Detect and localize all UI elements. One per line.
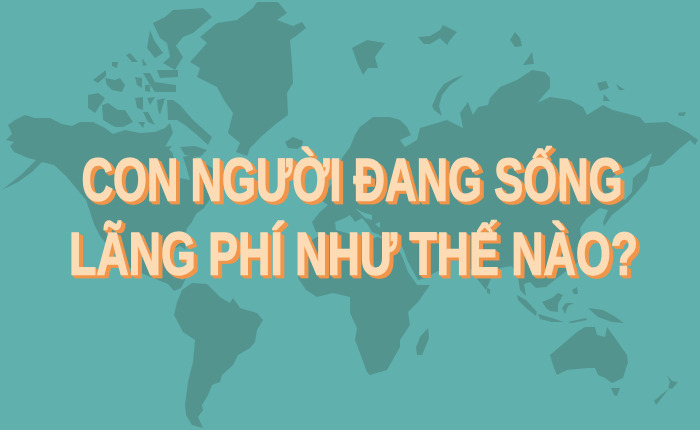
North America	[2, 115, 222, 291]
title	[69, 146, 642, 290]
Africa	[298, 232, 430, 375]
Baffin island	[167, 100, 212, 145]
Philippines	[572, 287, 578, 294]
Tasmania	[611, 388, 620, 396]
Java and Lesser Sunda	[538, 314, 587, 323]
Svalbard	[352, 40, 385, 75]
South America	[174, 283, 263, 428]
Australia	[550, 327, 628, 383]
Southeast Asian islands	[487, 287, 624, 323]
New Guinea	[588, 308, 624, 323]
Eurasia	[312, 70, 698, 296]
Sri Lanka	[487, 288, 490, 294]
Ellesmere island	[153, 8, 212, 70]
Southampton island	[180, 146, 207, 157]
Mediterranean, Black Sea and Arabian Sea water	[335, 208, 450, 275]
Franz Josef Land	[418, 25, 457, 45]
smaller islands	[93, 53, 178, 151]
Madagascar	[416, 328, 429, 355]
Severnaya Zemlya	[510, 32, 534, 65]
Victoria island	[102, 103, 133, 127]
Banks island	[88, 93, 105, 113]
Borneo	[542, 293, 563, 312]
Iceland	[285, 137, 303, 149]
Sulawesi	[562, 303, 574, 314]
Okhotsk Sea water	[610, 153, 652, 200]
New Siberian and Wrangel islands	[597, 81, 686, 116]
Greenland	[190, 2, 306, 156]
Canadian Arctic islands	[88, 8, 212, 157]
New Zealand	[654, 375, 678, 405]
Novaya Zemlya	[432, 75, 464, 116]
Axel Heiberg island	[147, 30, 163, 58]
Sumatra	[517, 295, 537, 316]
